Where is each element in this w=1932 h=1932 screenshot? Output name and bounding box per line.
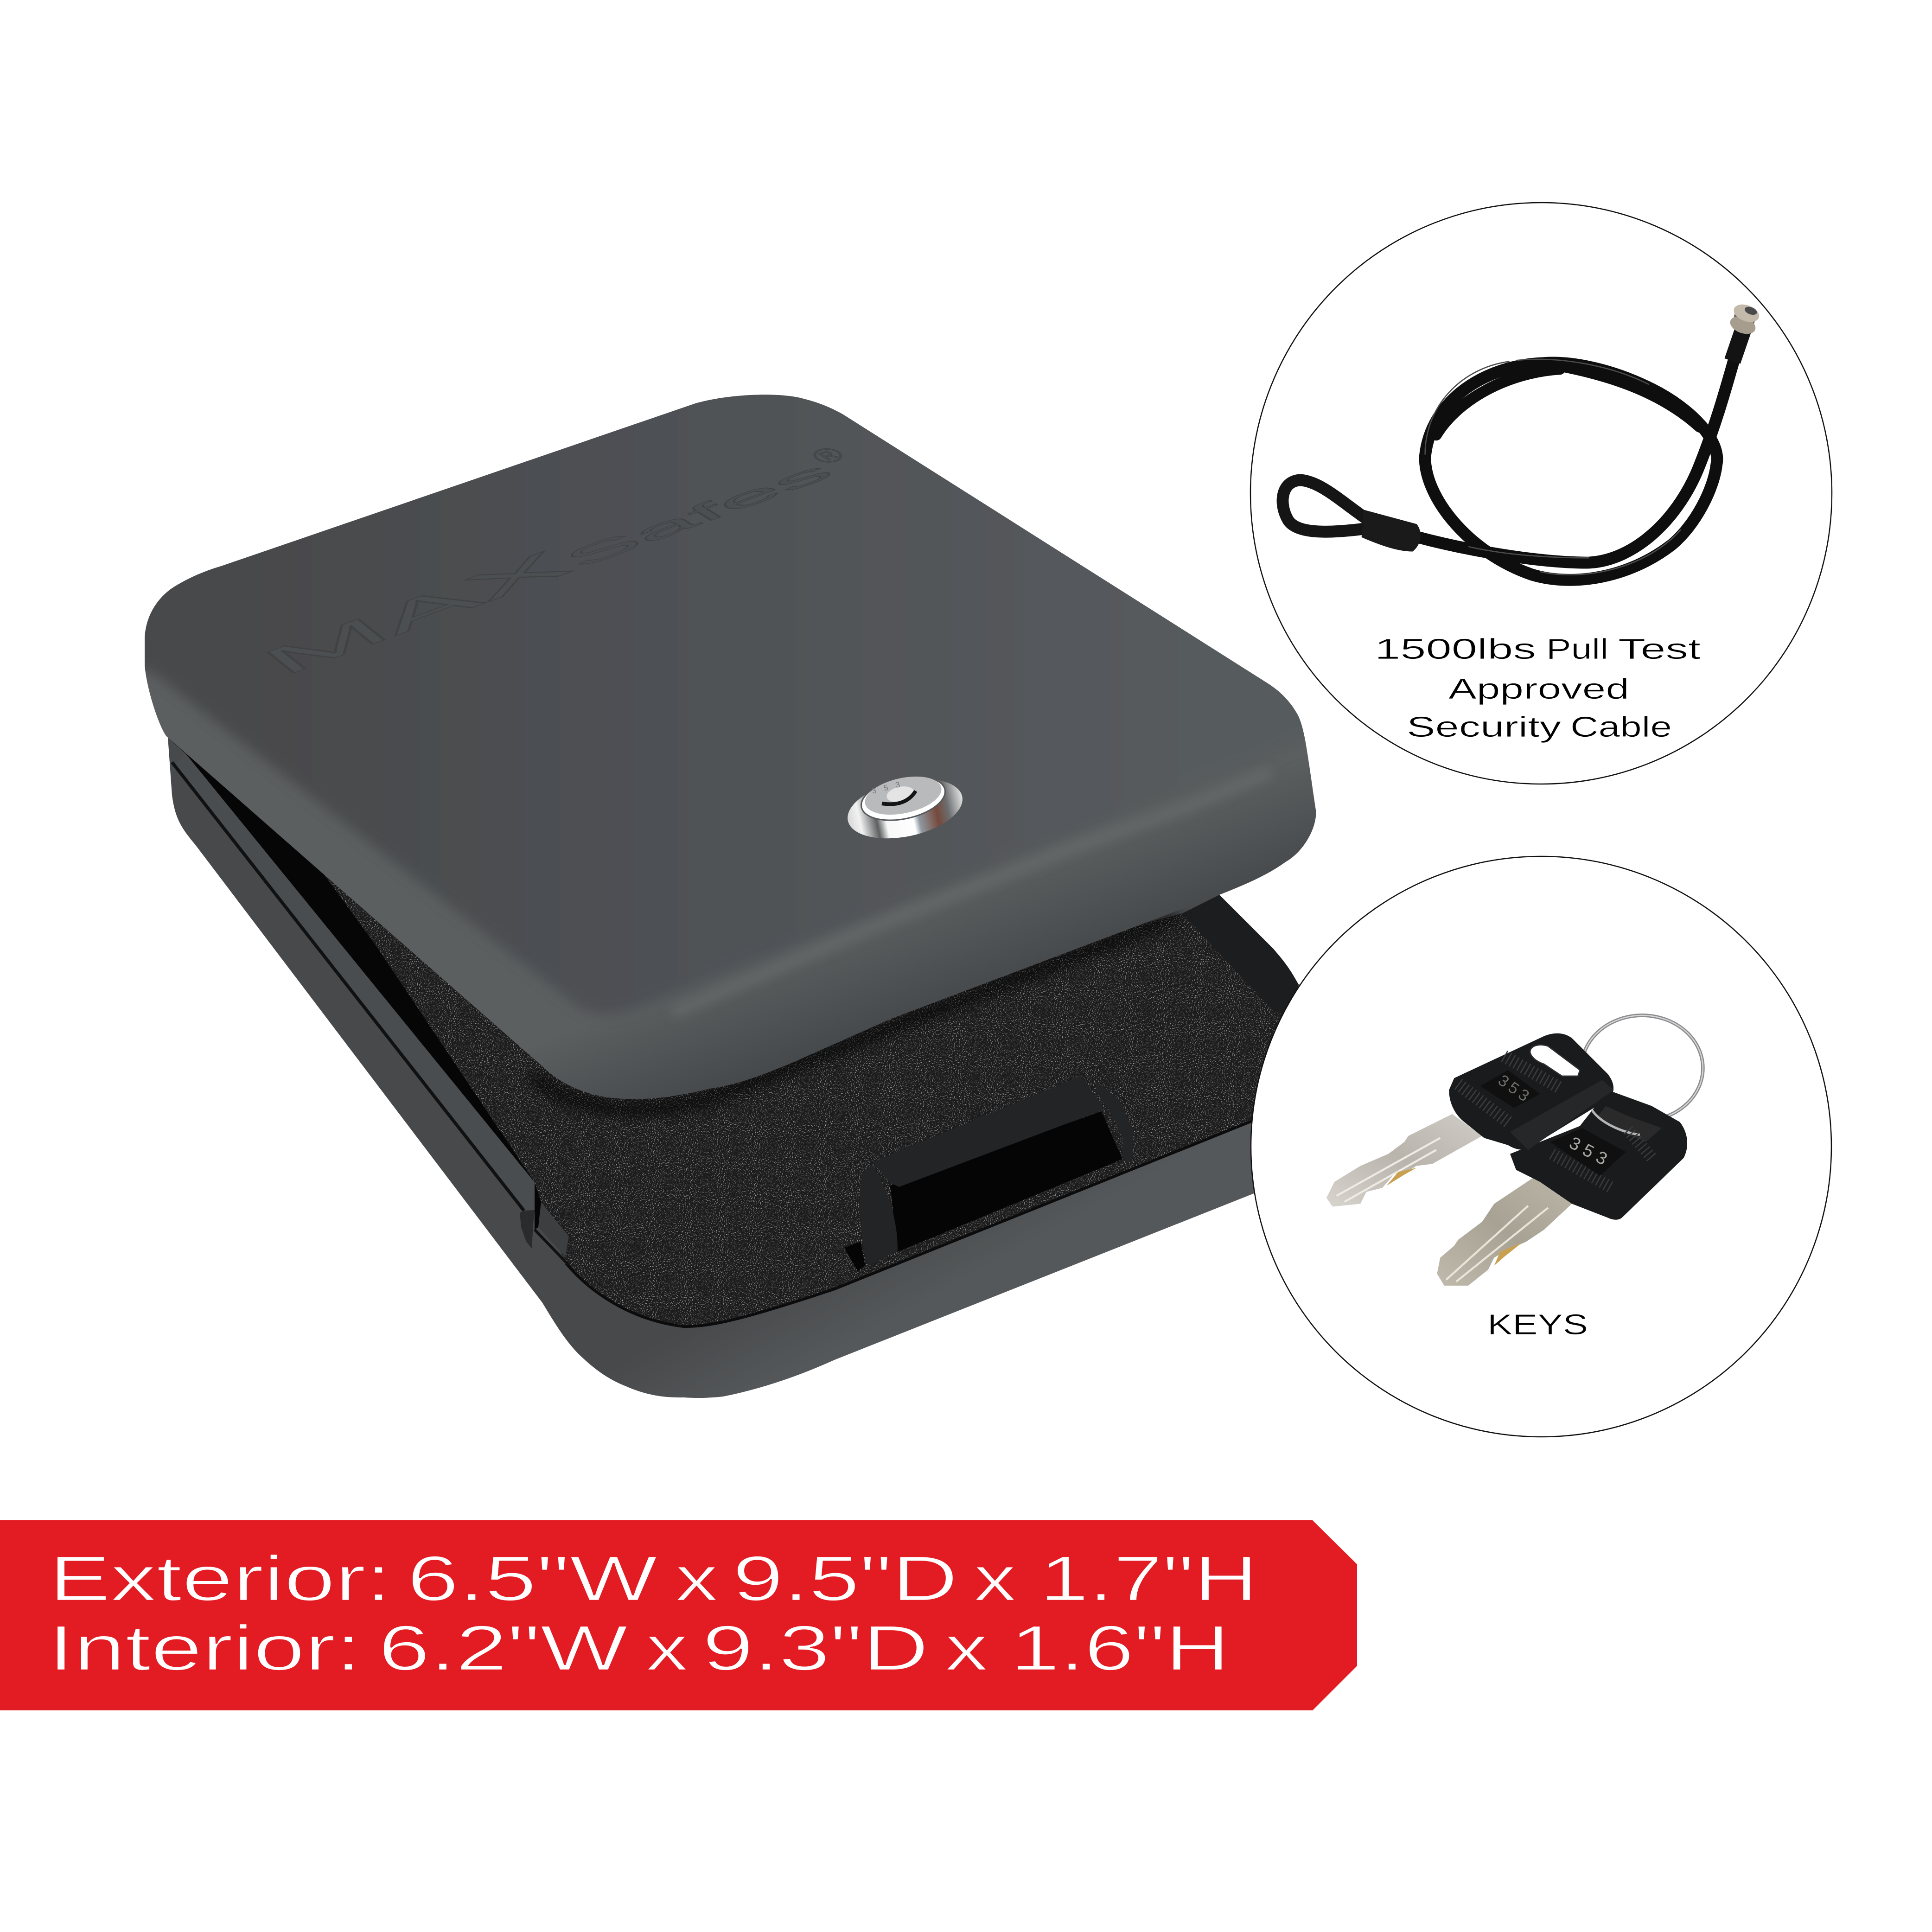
lock face <box>861 770 945 821</box>
interior dimensions: 9.3"D <box>702 1613 929 1684</box>
cable ring <box>1425 363 1717 580</box>
latch <box>844 1076 1133 1271</box>
latch core <box>890 1111 1122 1252</box>
callout circle: keys <box>1251 856 1831 1437</box>
key lock <box>842 769 968 848</box>
lower key head <box>1510 1090 1687 1220</box>
upper key label <box>1480 1070 1540 1108</box>
callout circle: security cable <box>1250 203 1832 784</box>
upper key blade <box>1326 1114 1482 1206</box>
lower key blade <box>1437 1176 1574 1286</box>
upper key front edge <box>1510 1080 1614 1150</box>
lower key grip ribs <box>1552 1130 1652 1188</box>
metal end cap <box>1728 301 1761 337</box>
black inner left wall <box>166 736 541 1230</box>
circle outline <box>1250 203 1832 784</box>
interior dimensions: x <box>646 1613 688 1684</box>
upper key bitting <box>1386 1168 1416 1186</box>
lock collar <box>842 769 968 848</box>
upper key head <box>1449 1033 1613 1150</box>
exterior dimensions: x <box>675 1543 718 1614</box>
hinge shadow line <box>535 1230 569 1265</box>
lid shadow <box>533 916 1178 1109</box>
caption: cable: Test <box>1618 633 1701 665</box>
cable highlight <box>1425 359 1681 575</box>
keyway recess <box>885 784 916 804</box>
upper key hole <box>1530 1045 1580 1076</box>
tray exterior <box>168 737 1321 1398</box>
caption: cable: Cable <box>1570 711 1672 743</box>
lower key number: 353 <box>1566 1133 1610 1169</box>
foam lining <box>232 788 1321 1326</box>
caption: cable: 1500lbs <box>1375 633 1536 665</box>
end cap hole <box>1744 305 1758 316</box>
tray inner right wall <box>1182 895 1298 1020</box>
key ring <box>1581 1015 1703 1121</box>
lower key slot <box>1598 1106 1662 1142</box>
cable end sleeve <box>1733 328 1744 361</box>
exterior dimensions: 6.5"W <box>407 1543 657 1614</box>
lower key label plate <box>1550 1128 1626 1176</box>
caption: cable: Approved <box>1448 673 1629 705</box>
end cap neck <box>1733 309 1756 330</box>
cable tail <box>1416 361 1734 563</box>
lid top face <box>145 395 1307 1014</box>
upper key label plate <box>1480 1070 1540 1108</box>
interior dimensions <box>48 1613 1230 1684</box>
keyway <box>882 791 916 804</box>
lid <box>107 362 1345 1099</box>
logo MAX: MAX <box>249 543 584 683</box>
red dimensions banner <box>0 1520 1357 1710</box>
lower key bitting <box>1494 1243 1522 1266</box>
exterior dimensions: Exterior: <box>49 1543 391 1614</box>
banner shape <box>0 1520 1357 1710</box>
lower key grooves <box>1446 1206 1548 1282</box>
upper key grip ribs <box>1458 1056 1560 1122</box>
upper key number: 353 <box>1495 1071 1532 1105</box>
caption: cable <box>1375 633 1701 743</box>
lid side <box>145 395 1316 1099</box>
lock number: 353 <box>871 780 901 796</box>
logo registered mark: ® <box>803 443 854 469</box>
circle outline <box>1251 856 1831 1437</box>
lower ferrule <box>1728 313 1758 337</box>
icon: security cable <box>1283 301 1761 580</box>
caption: cable: Security <box>1407 711 1561 743</box>
tray front wall top edge <box>566 1121 1252 1326</box>
hinge rail line <box>172 762 524 1211</box>
product: open MAXSafes lock box <box>107 362 1345 1398</box>
latch right end cap <box>1096 1081 1133 1165</box>
icon: keys <box>1326 1015 1703 1286</box>
upper key grooves <box>1336 1138 1440 1202</box>
ring through lower key <box>1592 1110 1640 1135</box>
cable sleeve <box>1362 511 1420 551</box>
lower key label <box>1550 1128 1626 1176</box>
interior dimensions: Interior: <box>48 1613 361 1684</box>
exterior dimensions <box>49 1543 1258 1614</box>
lid bevel highlight <box>672 772 1270 1013</box>
upper ferrule <box>1731 301 1761 325</box>
logo Safes: Safes <box>554 458 843 573</box>
hinge notch <box>520 1210 535 1249</box>
latch plate <box>873 1076 1103 1187</box>
interior dimensions: 6.2"W <box>378 1613 628 1684</box>
cable second strand <box>1436 366 1700 435</box>
interior dimensions: x <box>945 1613 988 1684</box>
lock rim <box>857 770 949 827</box>
exterior dimensions: x <box>974 1543 1016 1614</box>
inner lip <box>176 753 535 1211</box>
cable eyelet loop <box>1283 480 1366 532</box>
caption: keys: KEYS <box>1487 1309 1588 1341</box>
latch left end cap <box>860 1165 898 1266</box>
hinge end block <box>538 1202 569 1257</box>
interior dimensions: 1.6"H <box>1010 1613 1230 1684</box>
exterior dimensions: 1.7"H <box>1039 1543 1258 1614</box>
latch notch <box>844 1242 865 1271</box>
embossed logo <box>249 443 854 683</box>
exterior dimensions: 9.5"D <box>733 1543 958 1614</box>
caption: cable: Pull <box>1546 633 1608 665</box>
